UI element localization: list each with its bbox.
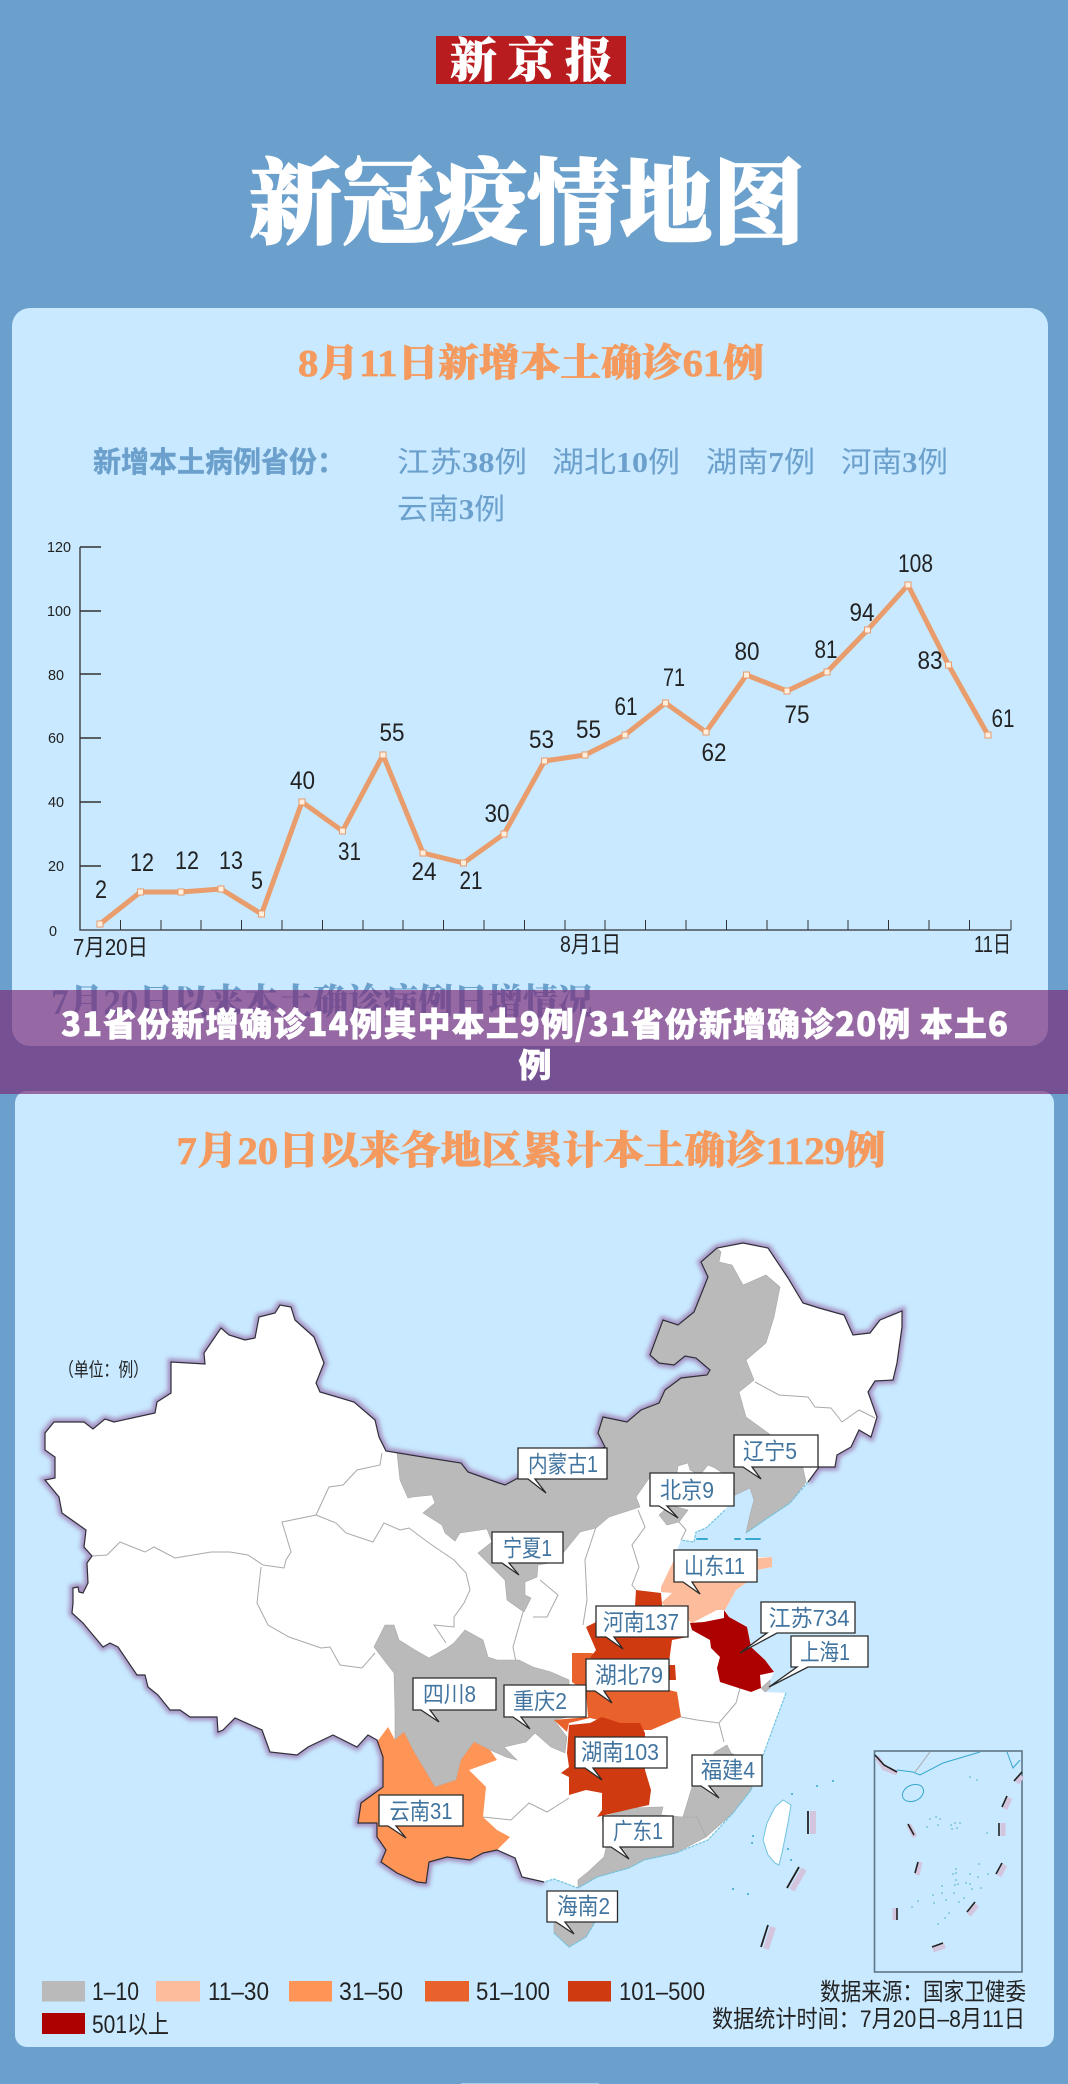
line chart: 61 bbox=[992, 705, 1014, 733]
line chart: 53 bbox=[529, 726, 554, 754]
line chart: 30 bbox=[484, 800, 510, 828]
callout: 江苏734: 江苏734 bbox=[768, 1605, 850, 1631]
callout: 上海1: 上海1 bbox=[800, 1639, 850, 1665]
callout: 宁夏1: 宁夏1 bbox=[503, 1535, 552, 1561]
legend: 501以上 bbox=[92, 2011, 169, 2039]
text: 江苏38例: 江苏38例 bbox=[397, 446, 527, 479]
callout: 北京9: 北京9 bbox=[660, 1477, 714, 1503]
headline banner bbox=[0, 990, 1068, 1094]
legend: 101–500 bbox=[619, 1978, 705, 2006]
region: 云南 31-50 bbox=[358, 1727, 510, 1883]
legend: 11–30 bbox=[208, 1978, 269, 2006]
callout: 海南2: 海南2 bbox=[557, 1893, 610, 1919]
callout: 北京9 bbox=[650, 1473, 734, 1518]
line chart: 24 bbox=[412, 858, 437, 886]
line chart: 60 bbox=[48, 730, 64, 747]
line chart: 81 bbox=[814, 636, 838, 664]
line chart: 11日 bbox=[974, 931, 1011, 957]
map of China bbox=[45, 1243, 1022, 1972]
line chart: 80 bbox=[734, 638, 760, 666]
callout: 海南2 bbox=[547, 1891, 618, 1934]
panel: daily new cases bbox=[12, 308, 1048, 1046]
land border bbox=[45, 1243, 902, 1883]
heading: chart title (partly covered by banner): 7月20日以来本土确诊病例日增情况 bbox=[51, 981, 593, 1022]
panel: cumulative map bbox=[0, 990, 1068, 2084]
line chart: 120 bbox=[47, 539, 71, 556]
text: 湖南7例: 湖南7例 bbox=[706, 446, 815, 479]
region: 湖北 51-100 bbox=[554, 1653, 681, 1732]
line chart: 100 bbox=[47, 603, 71, 620]
line chart: 55 bbox=[380, 719, 404, 747]
line chart: 71 bbox=[663, 664, 685, 692]
region: 山东 11-30 bbox=[661, 1557, 772, 1623]
text: unit: （单位：例） bbox=[59, 1359, 148, 1381]
region: 河南 101-500 bbox=[586, 1590, 688, 1680]
legend: 31–50 bbox=[339, 1978, 403, 2006]
region: 湖南 101-500 bbox=[561, 1717, 651, 1817]
callout: 重庆2: 重庆2 bbox=[513, 1688, 567, 1714]
callout: 云南31 bbox=[379, 1795, 463, 1838]
callout: 辽宁5 bbox=[734, 1435, 818, 1479]
line chart: 0 bbox=[49, 923, 57, 940]
headline banner: 例 bbox=[518, 1039, 552, 1087]
line chart: 31 bbox=[338, 838, 361, 866]
line chart: 12 bbox=[130, 849, 154, 877]
callout: 广东1: 广东1 bbox=[613, 1818, 663, 1844]
region: 江苏 501+ bbox=[690, 1610, 774, 1692]
callout: 湖南103: 湖南103 bbox=[581, 1739, 659, 1765]
line chart: 5 bbox=[251, 867, 263, 895]
line chart bbox=[47, 539, 1014, 960]
callout: 四川8 bbox=[413, 1678, 496, 1722]
line chart: 40 bbox=[48, 794, 64, 811]
heading: 7月20日以来各地区累计本土确诊1129例: 7月20日以来各地区累计本土确诊1129例 bbox=[176, 1129, 886, 1173]
legend: 1–10 bbox=[92, 1978, 139, 2006]
callout: 福建4: 福建4 bbox=[701, 1757, 755, 1783]
line chart: 62 bbox=[702, 739, 726, 767]
line chart: 83 bbox=[918, 647, 942, 675]
line chart: 20 bbox=[48, 858, 64, 875]
callout: 辽宁5: 辽宁5 bbox=[743, 1438, 797, 1464]
line chart: 75 bbox=[784, 701, 810, 729]
callout: 云南31: 云南31 bbox=[390, 1798, 452, 1824]
text: 河南3例: 河南3例 bbox=[841, 446, 948, 479]
inset map: South China Sea bbox=[874, 1751, 1022, 1972]
callout: 江苏734 bbox=[740, 1602, 855, 1653]
line chart: 108 bbox=[898, 550, 933, 578]
legend: 51–100 bbox=[476, 1978, 550, 2006]
text: 湖北10例: 湖北10例 bbox=[552, 446, 680, 479]
line chart: 40 bbox=[290, 767, 315, 795]
headline banner: 31省份新增确诊14例其中本土9例/31省份新增确诊20例 本土6 bbox=[61, 998, 1008, 1046]
callout: 广东1 bbox=[603, 1816, 673, 1859]
callout: 内蒙古1 bbox=[518, 1448, 607, 1493]
heading: 8月11日新增本土确诊61例: 8月11日新增本土确诊61例 bbox=[298, 342, 764, 385]
callout: 内蒙古1: 内蒙古1 bbox=[528, 1451, 598, 1477]
callout: 河南137 bbox=[596, 1606, 688, 1649]
Taiwan bbox=[763, 1800, 791, 1865]
line chart: 2 bbox=[95, 876, 107, 904]
callout: 宁夏1 bbox=[492, 1532, 563, 1575]
text: new case provinces label: 新增本土病例省份： bbox=[93, 446, 345, 479]
callout: 湖北79: 湖北79 bbox=[595, 1662, 663, 1688]
coastline bbox=[544, 1482, 808, 1947]
text: data source: 数据来源：国家卫健委 bbox=[820, 1979, 1026, 2006]
callout: 河南137: 河南137 bbox=[603, 1609, 679, 1635]
text: data period: 数据统计时间：7月20日–8月11日 bbox=[712, 2006, 1025, 2033]
callout: 上海1 bbox=[769, 1636, 868, 1687]
line chart: 7月20日 bbox=[73, 934, 148, 960]
callout: 山东11: 山东11 bbox=[684, 1553, 745, 1579]
line chart: 12 bbox=[175, 847, 199, 875]
province borders bbox=[92, 1382, 875, 1820]
bottom edge sliver bbox=[461, 2083, 599, 2084]
line chart: 8月1日 bbox=[560, 931, 621, 957]
line chart: 55 bbox=[576, 716, 601, 744]
line chart: 61 bbox=[614, 693, 638, 721]
text: 云南3例: 云南3例 bbox=[397, 493, 505, 526]
title: 新冠疫情地图 bbox=[249, 154, 805, 257]
callout: 湖南103 bbox=[575, 1737, 667, 1780]
legend bbox=[42, 1978, 705, 2039]
callout: 山东11 bbox=[674, 1550, 757, 1594]
line chart: 80 bbox=[48, 667, 64, 684]
line chart: 94 bbox=[850, 599, 875, 627]
callout: 四川8: 四川8 bbox=[423, 1681, 476, 1707]
nine-dash line bbox=[761, 1811, 813, 1949]
region: 1-10 grey provinces bbox=[374, 1248, 806, 1947]
line chart: 13 bbox=[219, 847, 243, 875]
land: white base bbox=[45, 1243, 902, 1888]
line chart: 21 bbox=[460, 867, 482, 895]
logo: 新京报: 新京报 bbox=[450, 35, 612, 88]
islands bbox=[697, 1503, 833, 1894]
callouts bbox=[379, 1435, 868, 1934]
callout: 福建4 bbox=[692, 1755, 762, 1798]
callout: 重庆2 bbox=[504, 1685, 586, 1729]
callout: 湖北79 bbox=[586, 1659, 669, 1703]
